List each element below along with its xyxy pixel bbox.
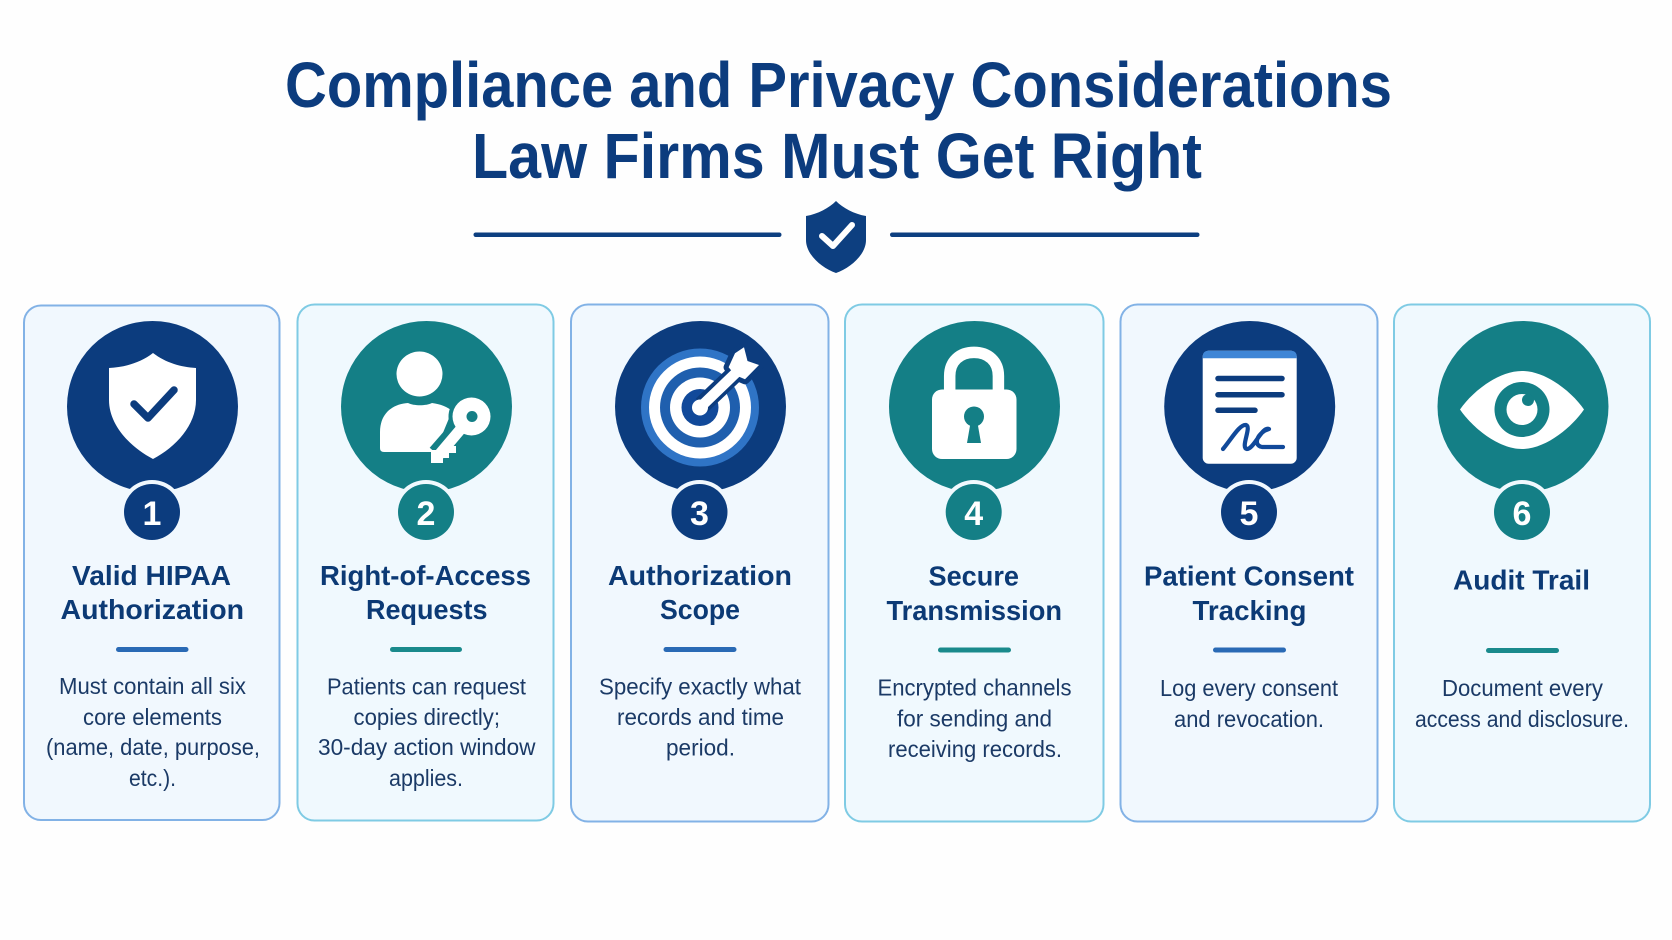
header xyxy=(285,49,1392,273)
description: Must contain all six xyxy=(59,673,246,699)
number badge 5: 5 xyxy=(1240,495,1258,533)
description: Encrypted channels xyxy=(878,674,1072,700)
title: Compliance and Privacy Considerations xyxy=(285,49,1392,121)
icon: target with arrow xyxy=(615,321,786,492)
description: Patients can request xyxy=(327,674,527,700)
description xyxy=(599,674,802,760)
heading: Requests xyxy=(366,594,488,625)
icon: eye xyxy=(1438,321,1608,492)
number badge 4 xyxy=(942,480,1006,544)
icon: person with key xyxy=(341,321,512,492)
number badge 3: 3 xyxy=(690,495,709,533)
description: core elements xyxy=(83,704,222,730)
description: 30-day action window xyxy=(318,734,536,760)
description: receiving records. xyxy=(888,736,1062,762)
panel: Secure Transmission xyxy=(845,304,1104,822)
heading: Transmission xyxy=(886,595,1062,626)
description: applies. xyxy=(389,765,463,791)
heading: Tracking xyxy=(1192,595,1306,626)
icon: shield with check xyxy=(67,321,238,492)
panel: Authorization Scope xyxy=(571,304,828,822)
description xyxy=(878,674,1072,762)
heading xyxy=(320,560,531,625)
number badge 6 xyxy=(1490,480,1554,544)
heading: Audit Trail xyxy=(1453,564,1590,596)
description xyxy=(318,674,536,791)
description: copies directly; xyxy=(354,704,500,730)
description: Log every consent xyxy=(1160,675,1339,701)
number badge 5 xyxy=(1217,480,1281,544)
number badge 3 xyxy=(668,480,732,544)
panel: Audit Trail xyxy=(1394,304,1650,822)
description: period. xyxy=(666,734,735,760)
heading: Right-of-Access xyxy=(320,560,531,591)
number badge 1 xyxy=(120,480,184,544)
heading: Secure xyxy=(928,560,1019,592)
heading xyxy=(1144,560,1354,626)
heading xyxy=(886,560,1062,626)
title: Law Firms Must Get Right xyxy=(472,120,1202,192)
description xyxy=(1160,675,1339,732)
description: etc.). xyxy=(129,765,176,791)
title divider with shield icon xyxy=(474,201,1200,273)
heading: Scope xyxy=(660,594,740,625)
heading: Authorization xyxy=(608,560,792,591)
number badge 2 xyxy=(394,480,458,544)
number badge 2: 2 xyxy=(417,495,435,533)
heading: Valid HIPAA xyxy=(72,560,231,591)
heading xyxy=(608,560,792,625)
number badge 6: 6 xyxy=(1513,495,1531,533)
description: Document every xyxy=(1442,675,1603,701)
description: for sending and xyxy=(897,706,1052,732)
panel: Right-of-Access Requests xyxy=(298,304,554,820)
description: records and time xyxy=(617,704,784,730)
heading xyxy=(60,560,244,625)
description xyxy=(46,673,260,791)
heading: Patient Consent xyxy=(1144,560,1354,592)
title xyxy=(285,49,1392,192)
description xyxy=(1415,675,1629,732)
icon: signed document xyxy=(1164,321,1335,492)
description: and revocation. xyxy=(1174,706,1324,732)
number badge 4: 4 xyxy=(964,495,983,533)
icon: padlock xyxy=(889,321,1060,492)
panel: Valid HIPAA Authorization xyxy=(24,306,280,820)
description: access and disclosure. xyxy=(1415,706,1629,732)
heading: Authorization xyxy=(60,594,244,625)
number badge 1: 1 xyxy=(143,495,161,533)
description: (name, date, purpose, xyxy=(46,734,260,760)
panel: Patient Consent Tracking xyxy=(1120,304,1378,822)
description: Specify exactly what xyxy=(599,674,802,700)
